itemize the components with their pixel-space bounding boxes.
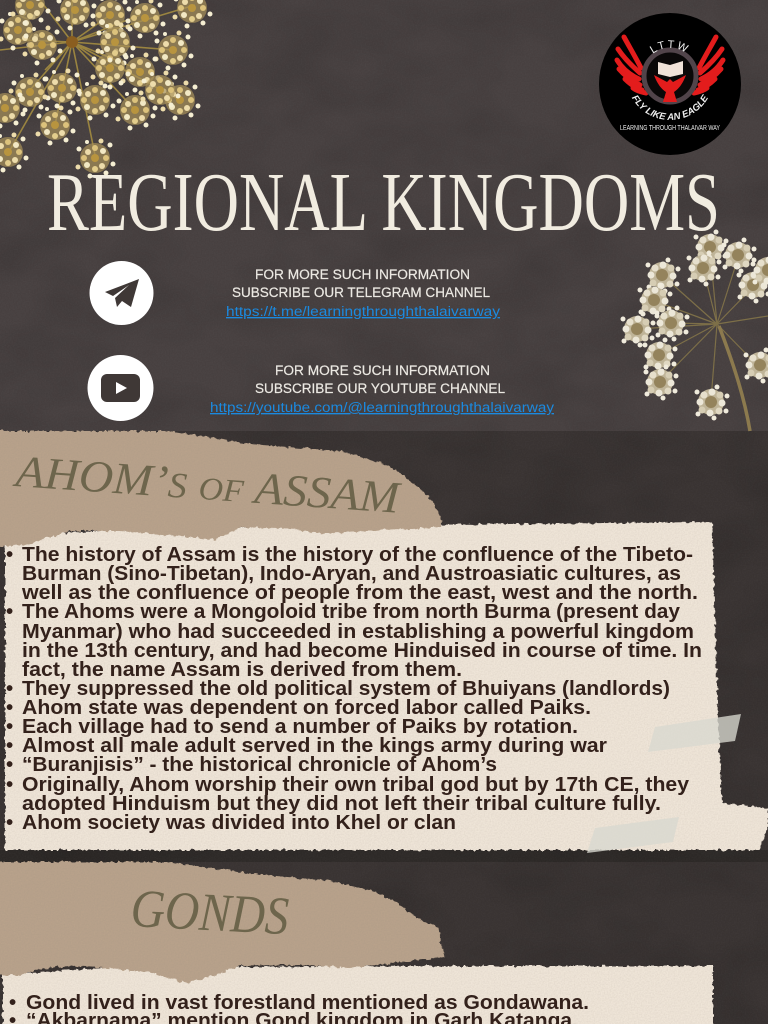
text block: Gonds bullet list: [9, 991, 589, 1024]
icon: right red wing: [694, 37, 723, 93]
text block: Ahom bullet list: •: [6, 543, 13, 566]
logo text: LEARNING THROUGH THALAIVAR WAY: [620, 123, 720, 132]
text block: Ahom bullet list: Burman (Sino-Tibetan), Indo-Aryan, and Austroasiatic cultures, as: [22, 562, 681, 585]
text block: Ahom bullet list: Myanmar) who had succeeded in establishing a powerful kingdom: [22, 620, 694, 643]
text block: youtube subscribe: [210, 363, 554, 415]
text block: Ahom bullet list: well as the confluence of people from the east, west and the north.: [21, 581, 698, 604]
text block: Ahom bullet list: •: [6, 753, 13, 776]
text block: Ahom bullet list: •: [6, 811, 13, 834]
text block: Ahom bullet list: •: [6, 715, 13, 738]
icon: youtube: [88, 355, 154, 421]
text block: Ahom bullet list: They suppressed the old political system of Bhuiyans (landlords): [22, 677, 670, 700]
text block: Ahom bullet list: Ahom state was dependent on forced labor called Paiks.: [22, 696, 591, 719]
text block: Ahom bullet list: •: [6, 773, 13, 796]
heading: Gonds: GONDS: [129, 878, 290, 946]
text block: telegram subscribe: SUBSCRIBE OUR TELEGRAM CHANNEL: [232, 285, 490, 300]
text block: Ahom bullet list: •: [6, 734, 13, 757]
text block: telegram subscribe: [226, 267, 500, 319]
text block: Ahom bullet list: The history of Assam is the history of the confluence of the Tibeto-: [22, 543, 693, 566]
icon: telegram: [90, 261, 154, 325]
text block: telegram subscribe: https://t.me/learningthroughthalaivarway: [226, 304, 500, 319]
icon: left red wing: [617, 37, 646, 93]
text block: Ahom bullet list: Each village had to send a number of Paiks by rotation.: [22, 715, 578, 738]
logo: LTTW round badge: [599, 13, 741, 155]
logo text: LTTW: [650, 40, 689, 54]
text block: Ahom bullet list: [6, 543, 702, 834]
decoration: dried flower top left: [0, 0, 212, 178]
panel: Gonds heading torn paper: [0, 862, 445, 983]
text block: youtube subscribe: https://youtube.com/@learningthroughthalaivarway: [210, 400, 554, 415]
text block: Ahom bullet list: in the 13th century, and had become Hinduised in course of time. In: [22, 639, 702, 662]
heading: Ahom's of Assam: AHOM’S OF ASSAM: [11, 446, 403, 523]
text block: Ahom bullet list: •: [6, 677, 13, 700]
tape: upper: [648, 714, 741, 752]
logo text: [620, 40, 720, 132]
panel: Ahom heading torn paper: [0, 431, 442, 546]
text block: Ahom bullet list: The Ahoms were a Mongoloid tribe from north Burma (present day: [22, 600, 681, 623]
logo text: FLY LIKE AN EAGLE: [632, 94, 708, 120]
panel: Gonds text paper: [3, 966, 713, 1024]
text block: Ahom bullet list: Originally, Ahom worship their own tribal god but by 17th CE, they: [22, 773, 690, 796]
text block: telegram subscribe: FOR MORE SUCH INFORMATION: [255, 267, 470, 282]
text block: youtube subscribe: SUBSCRIBE OUR YOUTUBE CHANNEL: [255, 381, 505, 396]
text block: youtube subscribe: FOR MORE SUCH INFORMATION: [275, 363, 490, 378]
text block: Gonds bullet list: Gond lived in vast forestland mentioned as Gondawana.: [26, 991, 589, 1014]
text block: Ahom bullet list: Almost all male adult served in the kings army during war: [22, 734, 607, 757]
icon: red eagle: [654, 75, 686, 102]
text block: Gonds bullet list: •: [9, 991, 16, 1014]
panel: Ahom text paper: [5, 522, 768, 853]
text block: Ahom bullet list: adopted Hinduism but they did not left their tribal culture fully.: [22, 792, 661, 815]
icon: open book: [658, 61, 683, 77]
text block: Ahom bullet list: “Buranjisis” - the historical chronicle of Ahom’s: [22, 753, 497, 776]
decoration: dried flower right: [620, 230, 768, 431]
text block: Ahom bullet list: •: [6, 600, 13, 623]
cream torn paper: [5, 522, 768, 850]
text block: Ahom bullet list: fact, the name Assam is derived from them.: [22, 658, 462, 681]
text block: Ahom bullet list: Ahom society was divided into Khel or clan: [22, 811, 456, 834]
text block: Ahom bullet list: •: [6, 696, 13, 719]
emblem ring: [644, 50, 696, 102]
tape: lower: [587, 817, 679, 853]
